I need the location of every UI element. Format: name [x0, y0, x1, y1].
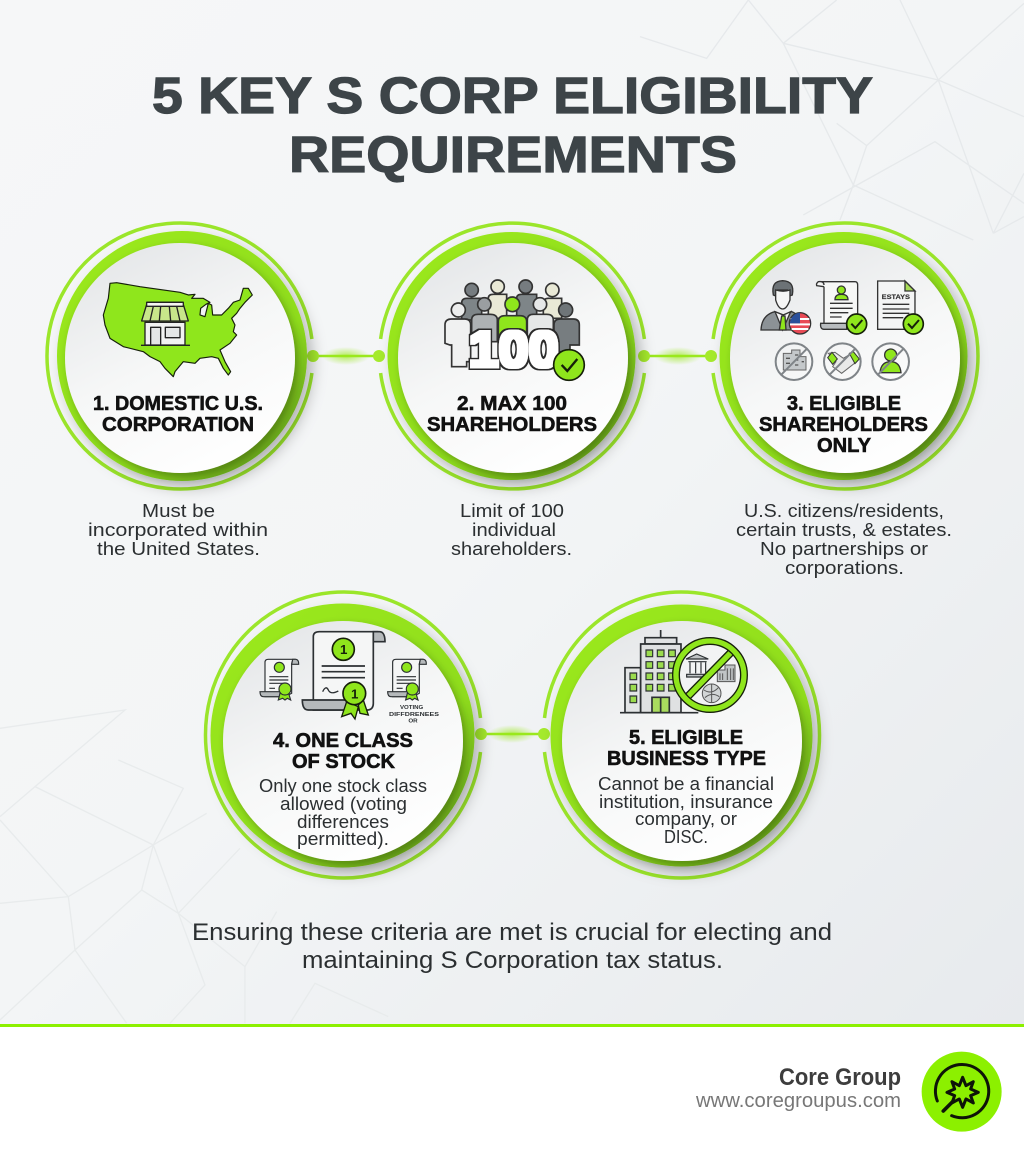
- description 3: No partnerships or: [760, 538, 928, 559]
- heading: OF STOCK: [292, 750, 395, 773]
- description 5: [598, 773, 774, 847]
- icon: eligible and ineligible shareholder types: [761, 281, 923, 380]
- footer brand text: www.coregroupus.com: [695, 1090, 901, 1112]
- icon: stock certificates with ribbon: OR: [408, 719, 418, 725]
- description 1: Must be: [142, 500, 215, 521]
- heading: [759, 392, 928, 457]
- icon: stock certificates with ribbon: 1: [340, 642, 348, 657]
- description 2: shareholders.: [451, 538, 572, 559]
- footer band: [0, 1024, 1024, 1154]
- icon: crowd of shareholders with 100: [445, 280, 584, 380]
- background line pattern: lower left: [0, 710, 388, 1023]
- description 3: certain trusts, & estates.: [736, 519, 952, 540]
- closing statement: [192, 919, 832, 974]
- description 3: [736, 500, 952, 578]
- title: 5 KEY S CORP ELIGIBILITY: [152, 67, 873, 124]
- icon: eligible and ineligible shareholder types: ESTAYS: [882, 294, 911, 301]
- panel: requirement 2: [381, 223, 644, 489]
- description 5: institution, insurance: [599, 791, 773, 812]
- heading: [427, 392, 597, 436]
- heading: [273, 729, 413, 773]
- description 4: differences: [297, 811, 389, 832]
- heading: 5. ELIGIBLE: [629, 726, 743, 749]
- panel: requirement 5: [544, 592, 820, 878]
- description 4: permitted).: [297, 828, 389, 849]
- footer brand text: [695, 1064, 901, 1112]
- icon: Core Group logo: [922, 1052, 1002, 1132]
- icon: stock certificates with ribbon: VOTING: [400, 705, 423, 711]
- connector 1 to 2: [307, 347, 385, 365]
- icon: US map with storefront: [103, 283, 252, 377]
- connector 4 to 5: [475, 725, 550, 743]
- description 2: individual: [472, 519, 556, 540]
- description 2: Limit of 100: [460, 500, 564, 521]
- heading: SHAREHOLDERS: [427, 413, 597, 436]
- heading: [93, 392, 263, 436]
- description 3: corporations.: [785, 557, 904, 578]
- description 1: incorporated within: [88, 519, 268, 540]
- icon: crowd of shareholders with 100: 100: [469, 322, 559, 378]
- connector 2 to 3: [638, 347, 717, 365]
- closing statement: maintaining S Corporation tax status.: [302, 947, 723, 974]
- panel: requirement 3: [713, 223, 978, 489]
- description 5: DISC.: [664, 826, 708, 847]
- description 5: Cannot be a financial: [598, 773, 774, 794]
- footer brand text: Core Group: [779, 1064, 901, 1091]
- description 4: allowed (voting: [280, 793, 407, 814]
- heading: 3. ELIGIBLE: [787, 392, 901, 415]
- description 2: [451, 500, 572, 559]
- description 4: [259, 775, 427, 849]
- description 4: Only one stock class: [259, 775, 427, 796]
- icon: building with prohibited institutions: [620, 630, 744, 713]
- heading: 2. MAX 100: [457, 392, 567, 415]
- icon: stock certificates with ribbon: DIFFDRENEES: [389, 712, 440, 718]
- description 1: the United States.: [97, 538, 260, 559]
- panel: requirement 4: [205, 592, 480, 878]
- title: REQUIREMENTS: [289, 126, 737, 183]
- panel: requirement 1: [47, 223, 312, 489]
- heading: ONLY: [817, 434, 871, 457]
- heading: SHAREHOLDERS: [759, 413, 928, 436]
- heading: BUSINESS TYPE: [607, 747, 766, 770]
- heading: [607, 726, 766, 770]
- icon: stock certificates with ribbon: [260, 632, 440, 725]
- icon: stock certificates with ribbon: 1: [351, 686, 359, 701]
- heading: 1. DOMESTIC U.S.: [93, 392, 263, 415]
- title: [152, 67, 873, 183]
- heading: 4. ONE CLASS: [273, 729, 413, 752]
- heading: CORPORATION: [102, 413, 254, 436]
- closing statement: Ensuring these criteria are met is crucial for electing and: [192, 919, 832, 946]
- description 3: U.S. citizens/residents,: [744, 500, 944, 521]
- description 5: company, or: [635, 808, 737, 829]
- description 1: [88, 500, 268, 559]
- background line pattern: top right: [640, 0, 1024, 240]
